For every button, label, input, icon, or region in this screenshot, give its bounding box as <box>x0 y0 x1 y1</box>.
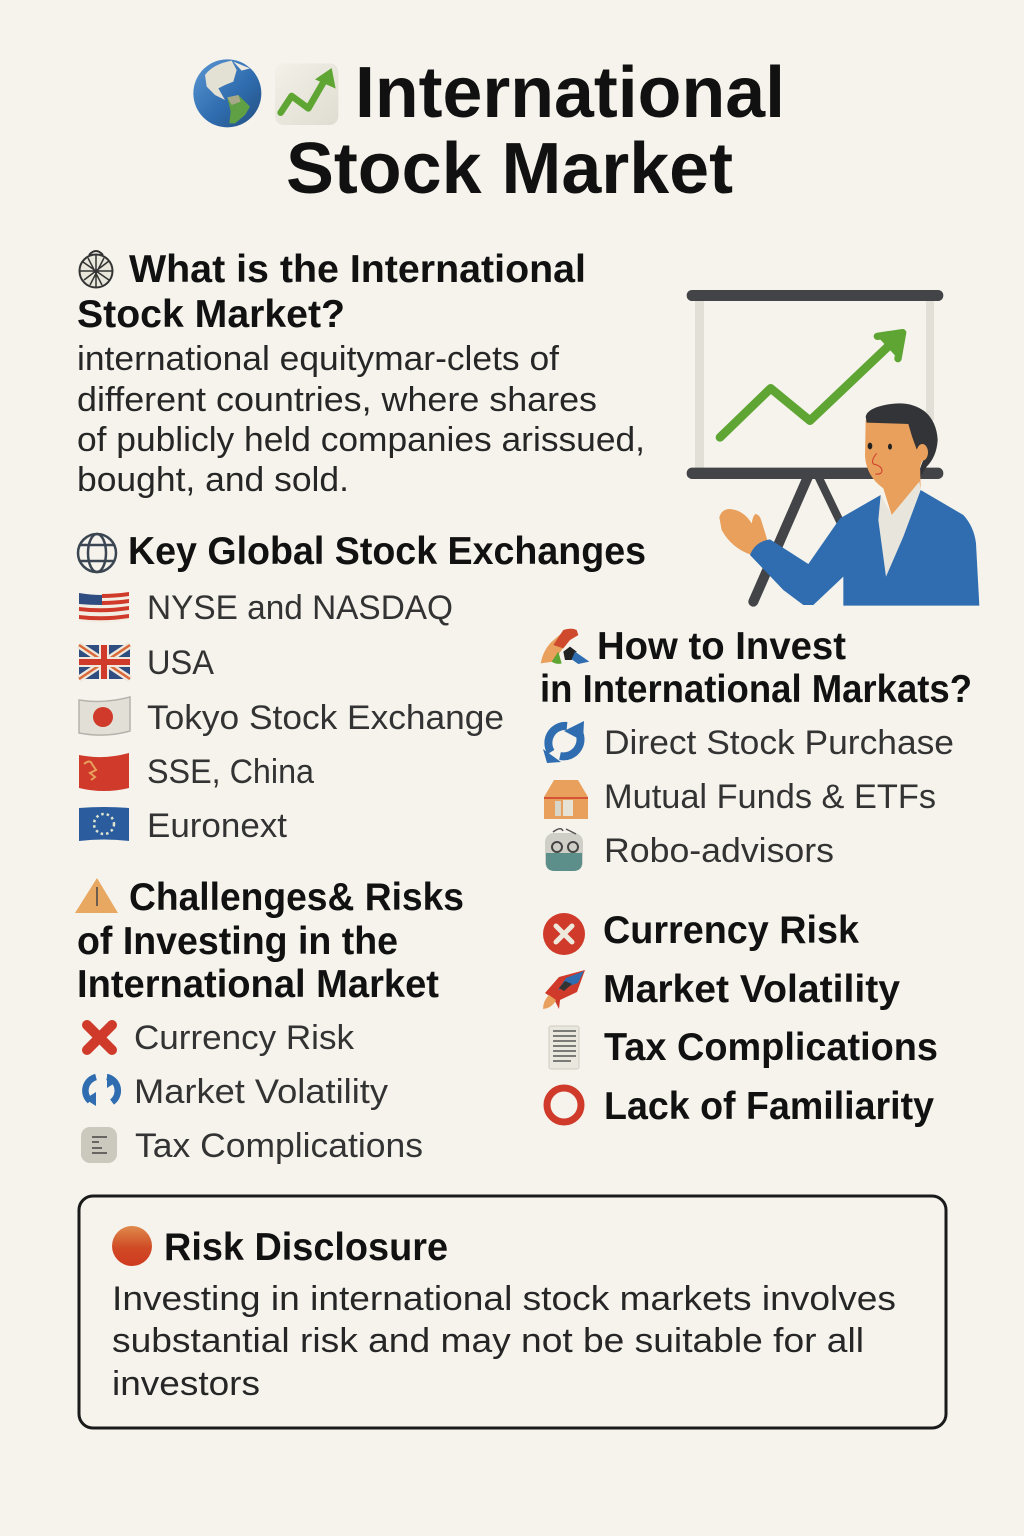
board bars <box>687 290 943 479</box>
icon: rocket <box>543 970 585 1009</box>
icon: red cross <box>87 1025 112 1050</box>
description text: of publicly held companies arissued, <box>77 421 645 459</box>
heading: of Investing in the <box>77 920 398 963</box>
heading: in International Markats? <box>540 668 972 711</box>
nose and mouth squiggle <box>873 453 882 474</box>
hand <box>719 509 767 555</box>
illustration: presenter with chart board <box>687 290 979 606</box>
disclosure text: Investing in international stock markets involves <box>112 1280 896 1318</box>
exchange text: SSE, China <box>147 753 314 791</box>
method text: Robo-advisors <box>604 832 834 870</box>
challenge text: Tax Complications <box>135 1127 423 1165</box>
challenge text: Currency Risk <box>134 1019 355 1057</box>
icon: hand with pen <box>541 629 589 664</box>
icon: sync arrows <box>543 721 584 763</box>
chart arrow <box>720 333 903 437</box>
icon: robot head <box>545 829 583 871</box>
icon: document <box>549 1026 579 1069</box>
ear <box>917 444 928 461</box>
exchange: EU flag <box>79 807 129 841</box>
panel: key global stock exchanges <box>78 530 646 845</box>
exchange: USA flag <box>79 592 129 623</box>
heading <box>540 625 972 711</box>
heading: International Market <box>77 963 439 1006</box>
icon: grey tile <box>81 1127 117 1163</box>
heading: Challenges& Risks <box>129 876 464 919</box>
exchange: China flag <box>79 753 129 791</box>
exchange text: NYSE and NASDAQ <box>147 589 453 627</box>
disclosure text <box>112 1280 896 1403</box>
heading <box>77 248 586 336</box>
exchange: Japan flag <box>79 697 130 735</box>
face and neck <box>865 420 927 515</box>
panel: risk highlights <box>543 909 938 1128</box>
method text: Mutual Funds & ETFs <box>604 778 936 816</box>
shirt <box>878 482 921 577</box>
icon: cracked ball <box>80 251 112 288</box>
easel legs <box>753 477 842 602</box>
exchange text: Tokyo Stock Exchange <box>147 699 504 737</box>
icon: blue cycle <box>85 1074 118 1106</box>
icon: red circle cross <box>543 913 585 955</box>
title line 2: Stock Market <box>286 129 733 209</box>
icon: warning triangle <box>75 878 118 913</box>
method text: Direct Stock Purchase <box>604 724 954 762</box>
title line 1: International <box>355 53 785 133</box>
challenge text: Market Volatility <box>134 1073 388 1111</box>
heading: What is the International <box>129 248 586 291</box>
icon: box <box>544 780 588 819</box>
risk text: Tax Complications <box>604 1026 938 1069</box>
exchange: UK flag <box>79 645 130 679</box>
icon: red ring <box>547 1088 581 1122</box>
exchange text: USA <box>147 644 214 682</box>
eyes <box>868 443 892 450</box>
description text: international equitymar-clets of <box>77 340 560 378</box>
icon: globe <box>193 59 261 127</box>
heading: How to Invest <box>597 625 846 668</box>
risk text: Lack of Familiarity <box>604 1085 934 1128</box>
description text: bought, and sold. <box>77 461 349 499</box>
infographic canvas <box>75 59 980 1430</box>
heading: Risk Disclosure <box>164 1226 448 1269</box>
hair <box>866 403 938 477</box>
disclosure text: substantial risk and may not be suitable for all <box>112 1322 864 1360</box>
icon: wireframe globe <box>78 534 116 572</box>
title <box>193 59 780 194</box>
risk text: Currency Risk <box>603 909 859 952</box>
heading: Key Global Stock Exchanges <box>128 530 646 573</box>
panel: challenges and risks <box>75 876 464 1165</box>
risk text: Market Volatility <box>603 968 900 1011</box>
jacket <box>750 490 979 606</box>
description text <box>77 340 645 499</box>
board posts <box>695 300 934 468</box>
icon: rising chart tile <box>275 63 338 125</box>
panel: risk disclosure <box>79 1196 946 1428</box>
exchange text: Euronext <box>147 807 288 845</box>
icon: red ball <box>112 1226 152 1266</box>
panel: what is the international stock market <box>77 248 645 499</box>
heading: Stock Market? <box>77 293 345 336</box>
panel: how to invest <box>540 625 972 871</box>
heading <box>77 876 464 1006</box>
description text: different countries, where shares <box>77 381 597 419</box>
disclosure text: investors <box>112 1365 260 1403</box>
callout box <box>79 1196 946 1428</box>
